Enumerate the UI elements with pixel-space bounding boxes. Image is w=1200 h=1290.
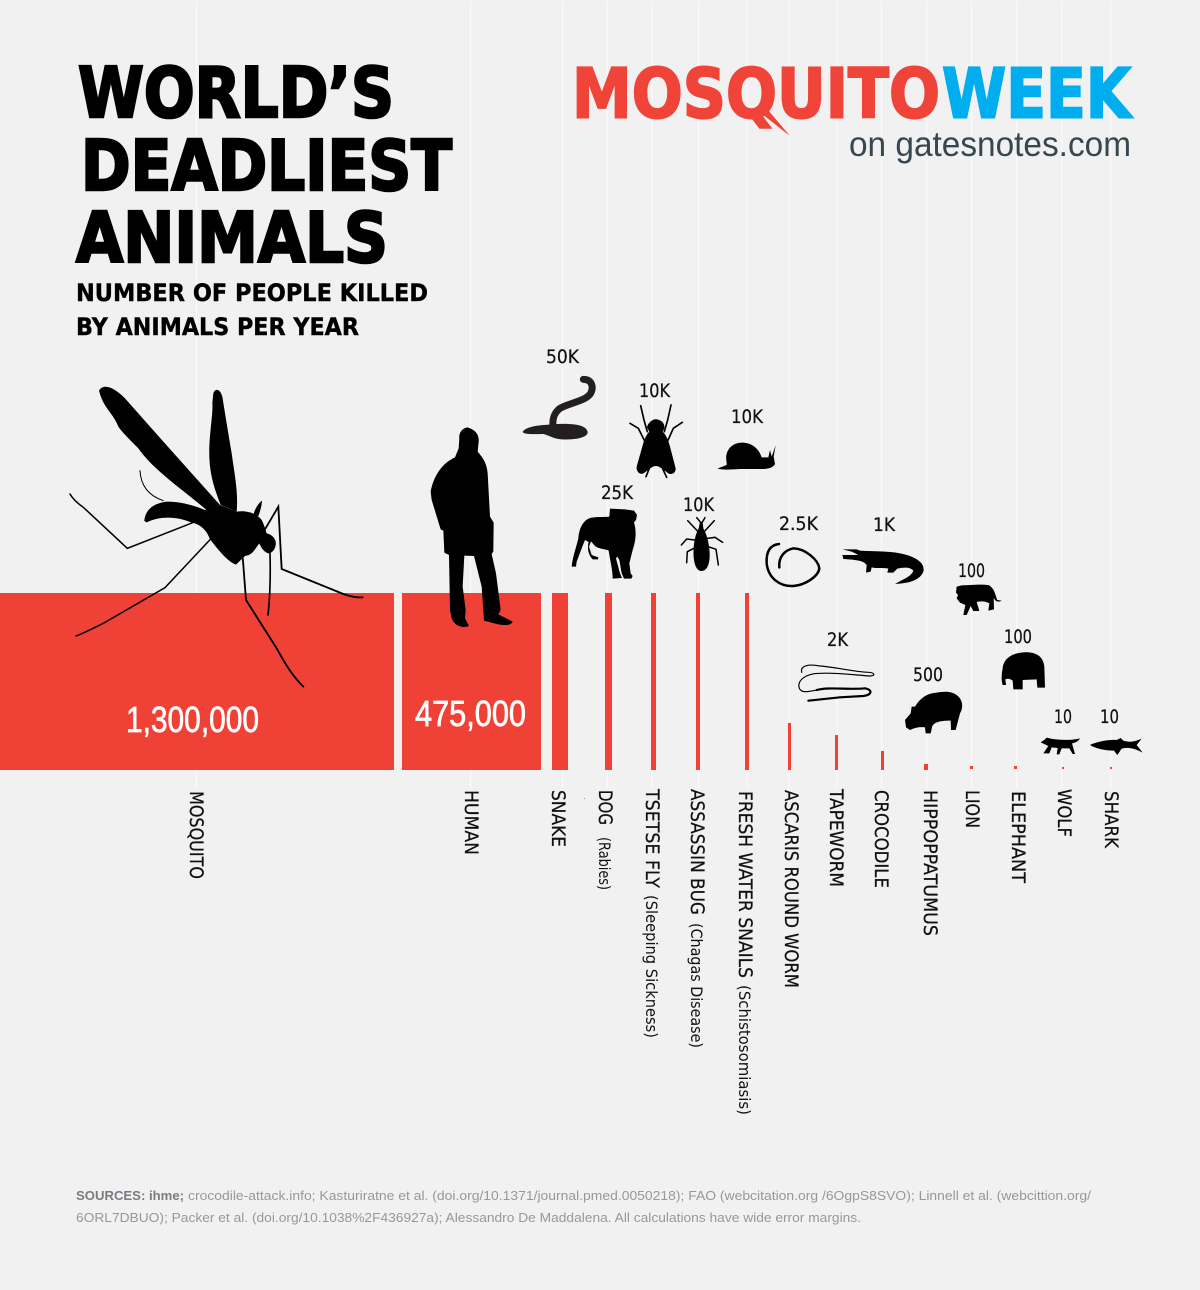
label: tsetse fly (sleeping sickness): (Sleeping Sickness): [642, 895, 661, 1038]
icon: lion: [956, 585, 1002, 615]
label: assassin bug (chagas disease): ASSASSIN BUG: [686, 789, 708, 915]
icon: snake: [523, 379, 592, 439]
subtitle: BY ANIMALS PER YEAR: [76, 313, 359, 341]
label: tsetse fly (sleeping sickness): [641, 788, 663, 1038]
icon: human: [431, 427, 513, 627]
label: assassin bug (chagas disease): [686, 789, 708, 1048]
value: tapeworm 2K: 2K: [827, 629, 848, 651]
bar: elephant: [1014, 766, 1017, 769]
bar: tsetse fly: [651, 593, 656, 770]
bar: shark: [1110, 767, 1112, 769]
icon: wolf: [1041, 738, 1080, 754]
label: human: HUMAN: [460, 790, 482, 855]
logo: Mosquito Week on gatesnotes.com: [572, 54, 1133, 164]
icon: tapeworm: [799, 665, 874, 701]
label: freshwater snails (schistosomiasis): [734, 791, 756, 1115]
bar: crocodile: [881, 751, 884, 770]
value: lion 100: 100: [958, 560, 985, 582]
icon: crocodile: [842, 549, 924, 584]
bar: dog: [605, 593, 612, 770]
label: tsetse fly (sleeping sickness): TSETSE FLY: [641, 788, 663, 888]
bar: wolf: [1062, 767, 1064, 769]
bar: lion: [970, 766, 973, 769]
label: shark: SHARK: [1100, 791, 1122, 848]
label: elephant: ELEPHANT: [1007, 791, 1029, 883]
label: tapeworm: TAPEWORM: [825, 788, 847, 887]
bar: assassin bug: [696, 593, 700, 770]
label: crocodile: CROCODILE: [870, 790, 892, 888]
label: freshwater snails (schistosomiasis): (Schistosomiasis): [735, 985, 754, 1115]
icon: assassin bug: [681, 518, 723, 571]
value: 1,300,000: 1,300,000: [126, 699, 259, 740]
label: dog (rabies): DOG: [594, 790, 616, 825]
value: wolf 10: 10: [1054, 706, 1072, 728]
subtitle: NUMBER OF PEOPLE KILLED: [76, 279, 428, 307]
value: shark 10: 10: [1100, 706, 1119, 728]
value: snail 10K: 10K: [731, 406, 763, 428]
label: hippopatumus: HIPPOPPATUMUS: [919, 790, 941, 936]
value: hippopotamus 500: 500: [913, 664, 943, 686]
logo: Mosquito Week on gatesnotes.com: on gatesnotes.com: [849, 125, 1131, 164]
value: assassin bug 10K: 10K: [683, 494, 714, 516]
value: crocodile 1K: 1K: [873, 514, 895, 536]
sources footnote: 6ORL7DBUO); Packer et al. (doi.org/10.1038%2F436927a); Alessandro De Maddalena. All calculations have wide error margins.: [76, 1210, 861, 1225]
value: 475,000: 475,000: [415, 693, 526, 734]
icon: mosquito: [70, 387, 363, 687]
bar: freshwater snails: [745, 593, 749, 770]
icon: dog: [572, 509, 637, 579]
label: freshwater snails (schistosomiasis): FRESH WATER SNAILS: [734, 791, 756, 978]
icon: ascaris round worm: [767, 544, 819, 586]
value: tsetse fly 10K: 10K: [639, 380, 670, 402]
logo: Mosquito Week on gatesnotes.com: MOSQUITO: [572, 54, 940, 134]
sources footnote: [76, 1188, 1091, 1225]
label: ascaris round worm: ASCARIS ROUND WORM: [780, 790, 802, 988]
label: lion: LION: [961, 790, 983, 828]
bar: human: [402, 593, 541, 770]
title: DEADLIEST: [81, 126, 453, 207]
bar chart: [0, 593, 1112, 770]
bar: snake: [552, 593, 568, 770]
title: ANIMALS: [76, 198, 388, 279]
value labels above icons: [546, 346, 1119, 728]
bar: mosquito: [0, 593, 394, 770]
icon: shark: [1090, 738, 1143, 755]
bar: hippopotamus: [924, 764, 928, 770]
icon: elephant: [1002, 652, 1045, 689]
label: assassin bug (chagas disease): (Chagas Disease): [687, 923, 706, 1048]
value: elephant 100: 100: [1004, 626, 1032, 648]
title: WORLD’S: [78, 53, 394, 134]
icon: freshwater snail: [717, 443, 776, 470]
subtitle: [76, 279, 428, 341]
label: dog (rabies): [594, 790, 616, 890]
icon: tsetse fly: [630, 405, 682, 477]
bar: tapeworm: [835, 735, 838, 770]
bar: ascaris round worm: [788, 723, 791, 770]
sources footnote: SOURCES: ihme;: [76, 1188, 184, 1203]
value: snake 50K: 50K: [546, 346, 579, 368]
value: ascaris 2.5K: 2.5K: [779, 513, 818, 535]
label: snake: SNAKE: [547, 790, 569, 847]
title: [76, 53, 453, 279]
label: dog (rabies): (Rabies): [595, 837, 614, 890]
logo: Mosquito Week on gatesnotes.com: WEEK: [942, 54, 1133, 134]
label: mosquito: MOSQUITO: [185, 791, 207, 879]
value: dog 25K: 25K: [601, 482, 633, 504]
vertical axis labels: [185, 788, 1122, 1115]
label: wolf: WOLF: [1053, 789, 1075, 837]
icon: hippopotamus: [905, 692, 962, 733]
sources footnote: crocodile-attack.info; Kasturiratne et al. (doi.org/10.1371/journal.pmed.0050218); FAO (webcitation.org /6OgpS8SVO); Linnell et al. (webcittion.org/: [188, 1188, 1091, 1203]
